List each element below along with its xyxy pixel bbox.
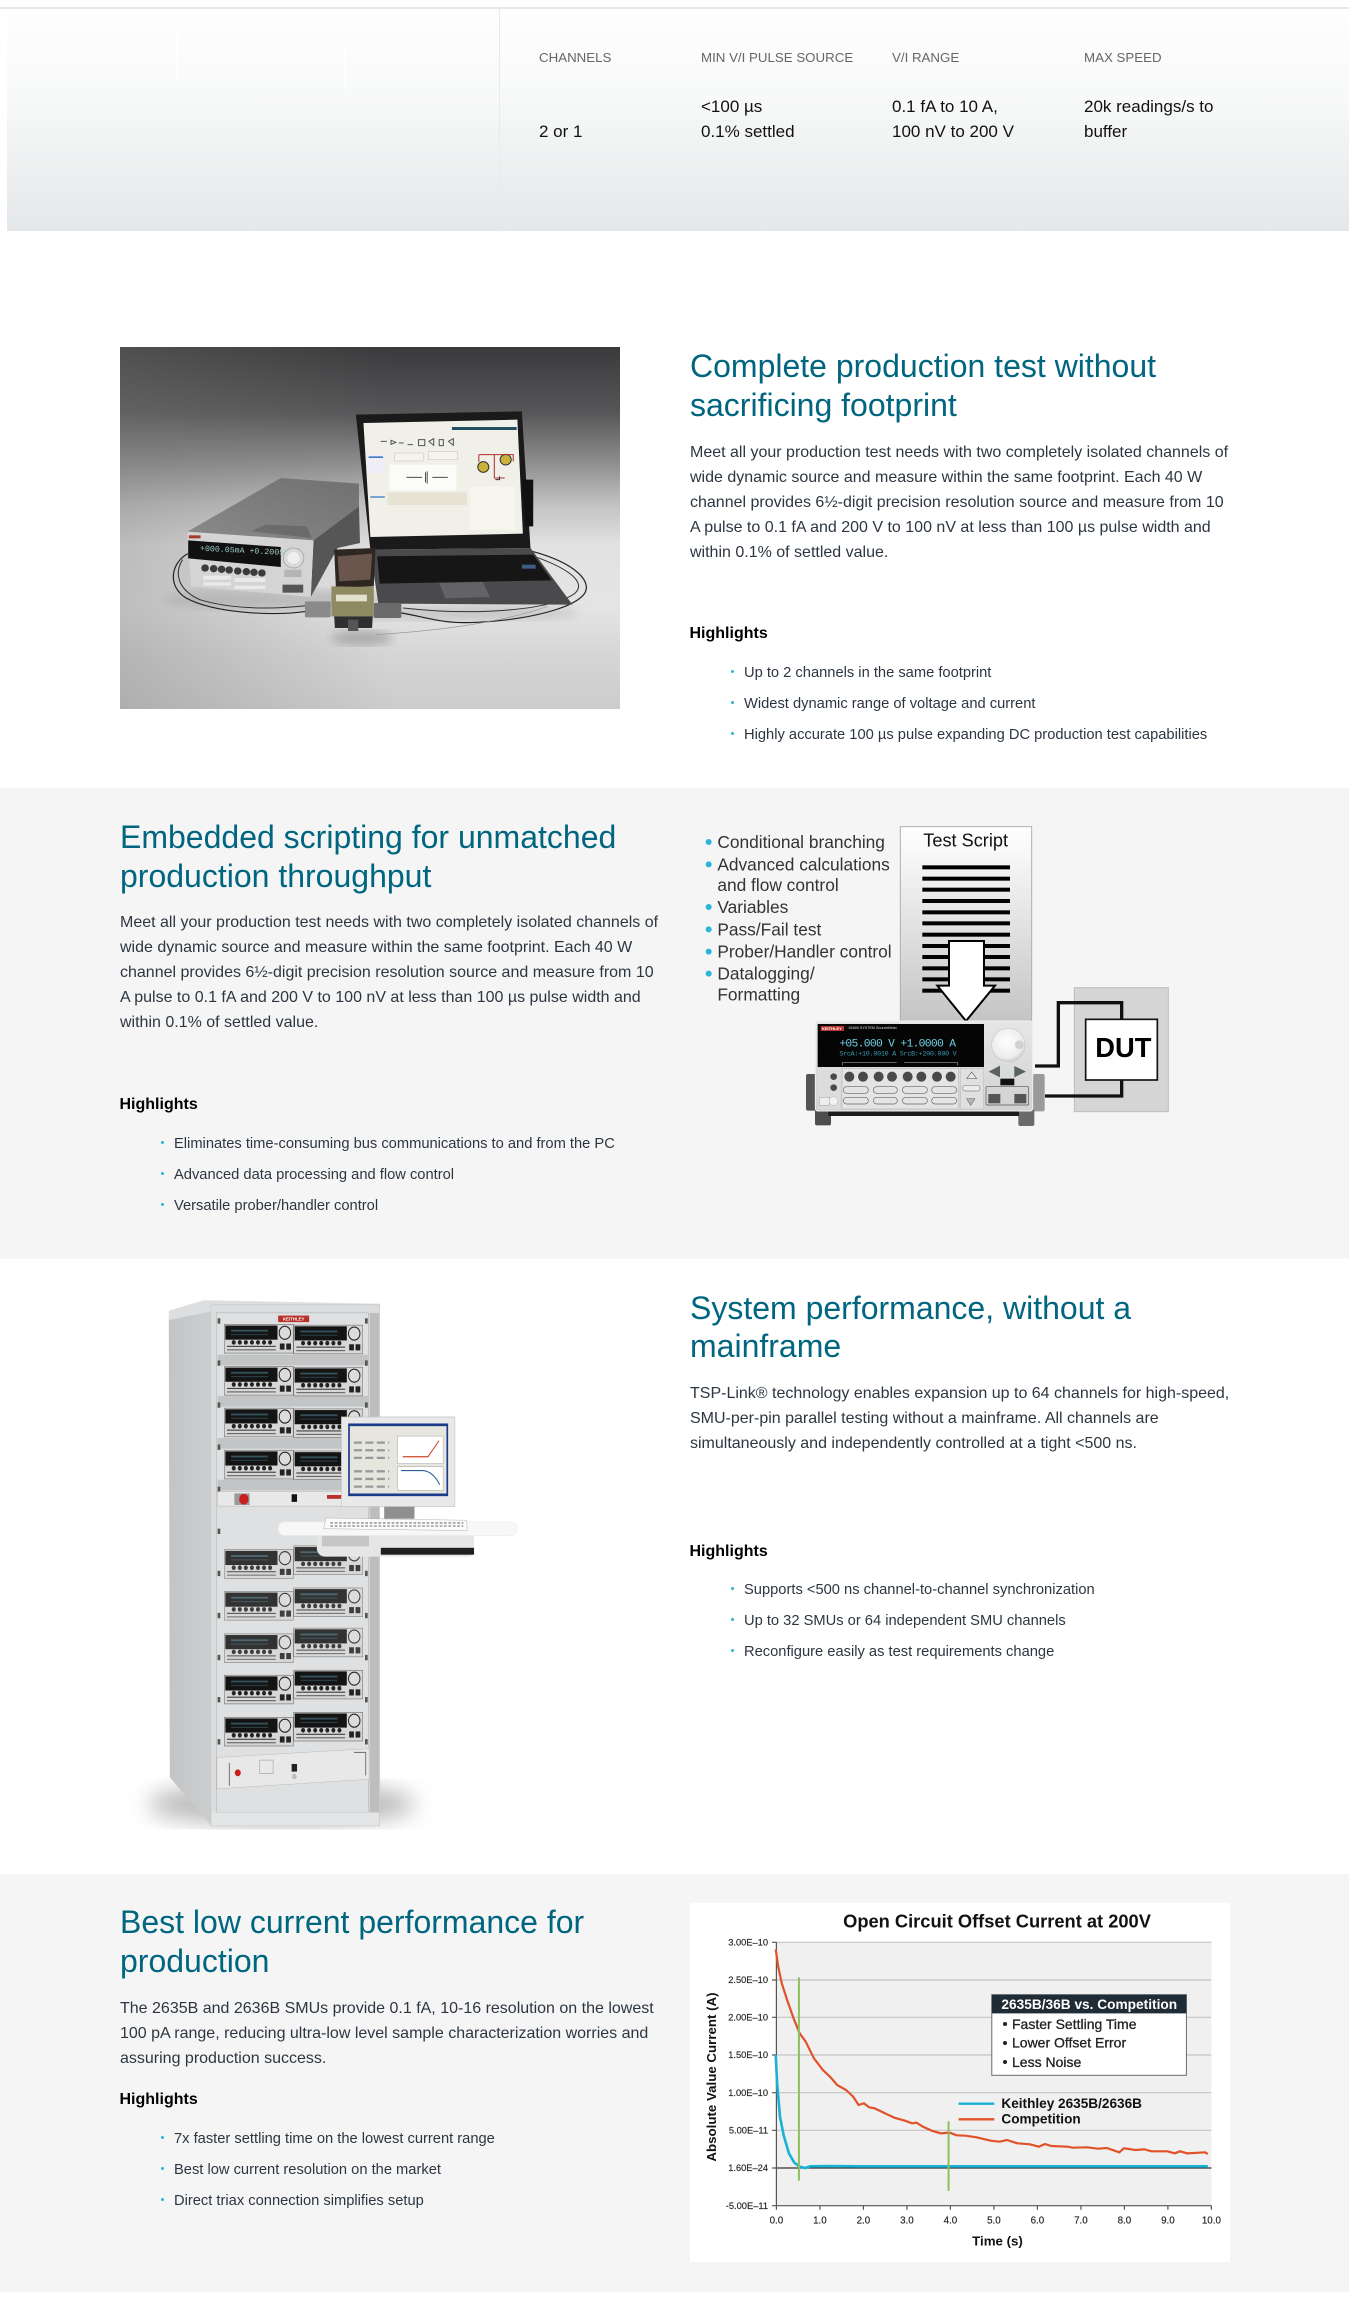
y axis labels: 5.00E–11 — [729, 2126, 768, 2136]
heading: Best low current performance for — [120, 1904, 584, 1940]
spec value: range: 100 nV to 200 V — [892, 122, 1014, 140]
highlights list: Advanced data processing and flow control — [174, 1166, 454, 1182]
x axis labels: 8.0 — [1118, 2216, 1132, 2226]
y axis labels: -5.00E–11 — [726, 2201, 768, 2211]
body text: wide dynamic source and measure within the same footprint. Each 40 W — [120, 938, 632, 956]
feature bullet list: Formatting — [717, 984, 800, 1004]
heading: Embedded scripting for unmatched — [120, 819, 616, 855]
photo: rack system with monitor — [142, 1300, 518, 1830]
cables — [173, 554, 307, 614]
heading — [120, 1904, 584, 1978]
feature bullet list: Variables — [717, 897, 789, 917]
body text: A pulse to 0.1 fA and 200 V to 100 nV at less than 100 µs pulse width and — [690, 518, 1211, 536]
instrument: source meter: 2636B SYSTEM SourceMeter — [848, 1026, 898, 1030]
body text — [120, 2000, 654, 2067]
body text: within 0.1% of settled value. — [690, 544, 888, 560]
spec value: speed: buffer — [1084, 122, 1127, 140]
comparison callout: Faster Settling Time — [1012, 2016, 1137, 2032]
x axis labels: 10.0 — [1202, 2216, 1221, 2226]
heading: Complete production test without — [690, 348, 1156, 384]
feature bullet list — [706, 832, 892, 1004]
body text: Meet all your production test needs with two completely isolated channels of — [120, 914, 658, 930]
highlights list: Widest dynamic range of voltage and current — [744, 696, 1035, 712]
test script document — [900, 827, 1032, 1023]
data curves — [776, 1949, 1208, 2191]
series legend — [959, 2096, 1142, 2127]
highlights list — [731, 664, 1207, 742]
x axis labels: 1.0 — [813, 2216, 827, 2226]
body text — [690, 444, 1228, 560]
highlights list: 7x faster settling time on the lowest current range — [174, 2130, 495, 2146]
lower panel — [217, 1749, 369, 1789]
feature bullet list: and flow control — [717, 875, 839, 895]
panel: header spec bar — [0, 7, 1349, 233]
highlights list: Best low current resolution on the market — [174, 2162, 441, 2178]
instrument: source meter — [806, 1021, 1045, 1126]
x axis labels: 3.0 — [900, 2216, 914, 2226]
keyboard shelf — [278, 1506, 517, 1557]
comparison callout — [992, 1995, 1186, 2075]
y axis labels: 1.60E–24 — [728, 2163, 768, 2173]
x axis labels: 5.0 — [987, 2216, 1001, 2226]
feature bullet list: Pass/Fail test — [717, 919, 822, 939]
heading: mainframe — [690, 1328, 841, 1364]
y axis labels: 3.00E–10 — [728, 1938, 768, 1948]
photo: instrument, laptop and test fixture — [120, 347, 620, 709]
heading: System performance, without a — [690, 1290, 1131, 1326]
body text: wide dynamic source and measure within the same footprint. Each 40 W — [690, 468, 1202, 486]
spec label: pulse source: MIN V/I PULSE SOURCE — [701, 50, 853, 65]
instrument: source meter: KEITHLEY — [822, 1026, 842, 1031]
highlights list: Reconfigure easily as test requirements change — [744, 1644, 1054, 1660]
spec label: range: V/I RANGE — [892, 50, 959, 65]
spec value: pulse source: <100 µs — [701, 96, 762, 116]
feature bullet list: Advanced calculations — [717, 854, 890, 874]
body text: The 2635B and 2636B SMUs provide 0.1 fA, 10-16 resolution on the lowest — [120, 2000, 654, 2017]
highlights heading: Highlights — [120, 1096, 198, 1113]
highlights list: Eliminates time-consuming bus communications to and from the PC — [174, 1136, 615, 1152]
y axis labels: 2.50E–10 — [728, 1975, 768, 1985]
source meter — [186, 478, 359, 540]
highlights list: Up to 32 SMUs or 64 independent SMU channels — [744, 1613, 1066, 1629]
control panel — [218, 1492, 369, 1506]
panel: low current performance section — [0, 1874, 1349, 2292]
DUT box — [1035, 988, 1168, 1112]
highlights list: Versatile prober/handler control — [174, 1198, 378, 1214]
highlights list: Highly accurate 100 µs pulse expanding DC production test capabilities — [744, 726, 1207, 742]
instrument: source meter: SrcA:+10.0010 A SrcB:+200.000 V — [839, 1050, 957, 1058]
body text: within 0.1% of settled value. — [120, 1014, 318, 1030]
heading — [690, 1290, 1132, 1364]
diagram: test script to instrument to DUT — [706, 826, 1169, 1126]
arrow: script down to instrument — [937, 941, 995, 1021]
highlights list — [161, 2130, 495, 2208]
x axis labels: 9.0 — [1161, 2216, 1175, 2226]
spec value: channels: 2 or 1 — [539, 122, 582, 140]
feature bullet list: Datalogging/ — [717, 964, 815, 984]
heading: sacrificing footprint — [690, 386, 957, 422]
DUT box: DUT — [1095, 1032, 1152, 1063]
heading — [120, 819, 616, 894]
y axis labels — [726, 1938, 768, 2211]
spec value: range — [892, 96, 1014, 140]
body text: A pulse to 0.1 fA and 200 V to 100 nV at less than 100 µs pulse width and — [120, 988, 641, 1006]
panel: complete production test section — [120, 347, 1228, 742]
test fixture — [334, 548, 376, 588]
logo — [278, 1316, 309, 1322]
y axis labels: 1.50E–10 — [728, 2050, 768, 2060]
x axis labels: 4.0 — [944, 2216, 958, 2226]
x axis labels: 0.0 — [770, 2216, 784, 2226]
series legend: Keithley 2635B/2636B — [1001, 2096, 1142, 2111]
spec value: range: 0.1 fA to 10 A, — [892, 96, 998, 116]
body text: Meet all your production test needs with two completely isolated channels of — [690, 444, 1228, 460]
x axis labels — [770, 2216, 1221, 2226]
spec value: pulse source — [701, 96, 795, 140]
body text: assuring production success. — [120, 2050, 326, 2067]
heading: production throughput — [120, 858, 431, 894]
x axis labels: 6.0 — [1031, 2216, 1045, 2226]
body text: channel provides 6½-digit precision resolution source and measure from 10 — [690, 494, 1224, 510]
highlights list: Direct triax connection simplifies setup — [174, 2192, 424, 2208]
body text — [120, 914, 658, 1030]
spec value: pulse source: 0.1% settled — [701, 122, 795, 140]
heading — [690, 348, 1156, 422]
x axis labels: 2.0 — [857, 2216, 871, 2226]
laptop — [356, 411, 530, 550]
highlights heading: Highlights — [120, 2091, 198, 2108]
line chart: open circuit offset current — [690, 1903, 1230, 2262]
highlights list: Supports <500 ns channel-to-channel synchronization — [744, 1582, 1095, 1598]
chart title: Open Circuit Offset Current at 200V — [843, 1910, 1152, 1932]
body text — [690, 1384, 1229, 1452]
highlights heading: Highlights — [690, 625, 768, 642]
highlights list — [731, 1582, 1095, 1660]
spec label: speed: MAX SPEED — [1084, 50, 1162, 65]
x axis title: Time (s) — [972, 2234, 1023, 2248]
body text: simultaneously and independently controlled at a tight <500 ns. — [690, 1434, 1137, 1452]
body text: TSP-Link® technology enables expansion up to 64 channels for high-speed, — [690, 1384, 1229, 1402]
highlights list: Up to 2 channels in the same footprint — [744, 664, 991, 680]
photo: instrument, laptop and test fixture: +000.05mA +0.2005V — [200, 545, 289, 558]
y axis labels: 1.00E–10 — [728, 2088, 768, 2098]
y axis title: Absolute Value Current (A) — [704, 1992, 719, 2162]
logo: KEITHLEY — [283, 1316, 305, 1322]
comparison callout: Lower Offset Error — [1012, 2035, 1126, 2051]
comparison callout: 2635B/36B vs. Competition — [1001, 1997, 1177, 2012]
monitor — [341, 1417, 455, 1506]
series legend: Competition — [1001, 2112, 1081, 2127]
x axis labels: 7.0 — [1074, 2216, 1088, 2226]
panel: system performance section — [142, 1290, 1229, 1830]
instrument: source meter: +05.000 V +1.0000 A — [839, 1039, 956, 1051]
instrument rows — [224, 1324, 363, 1746]
panel: embedded scripting section — [0, 788, 1349, 1259]
spec label: channels: CHANNELS — [539, 50, 611, 65]
body text: 100 pA range, reducing ultra-low level sample characterization worries and — [120, 2025, 648, 2042]
spec value: speed: 20k readings/s to — [1084, 96, 1213, 116]
feature bullet list: Conditional branching — [717, 832, 885, 852]
feature bullet list: Prober/Handler control — [717, 941, 892, 961]
body text: SMU-per-pin parallel testing without a mainframe. All channels are — [690, 1410, 1159, 1426]
test script document: Test Script — [923, 830, 1008, 850]
y axis labels: 2.00E–10 — [728, 2012, 768, 2022]
comparison callout: Less Noise — [1012, 2054, 1081, 2070]
heading: production — [120, 1942, 269, 1978]
highlights list — [161, 1136, 615, 1214]
body text: channel provides 6½-digit precision resolution source and measure from 10 — [120, 964, 654, 980]
highlights heading: Highlights — [690, 1542, 768, 1560]
spec value: speed — [1084, 96, 1213, 140]
